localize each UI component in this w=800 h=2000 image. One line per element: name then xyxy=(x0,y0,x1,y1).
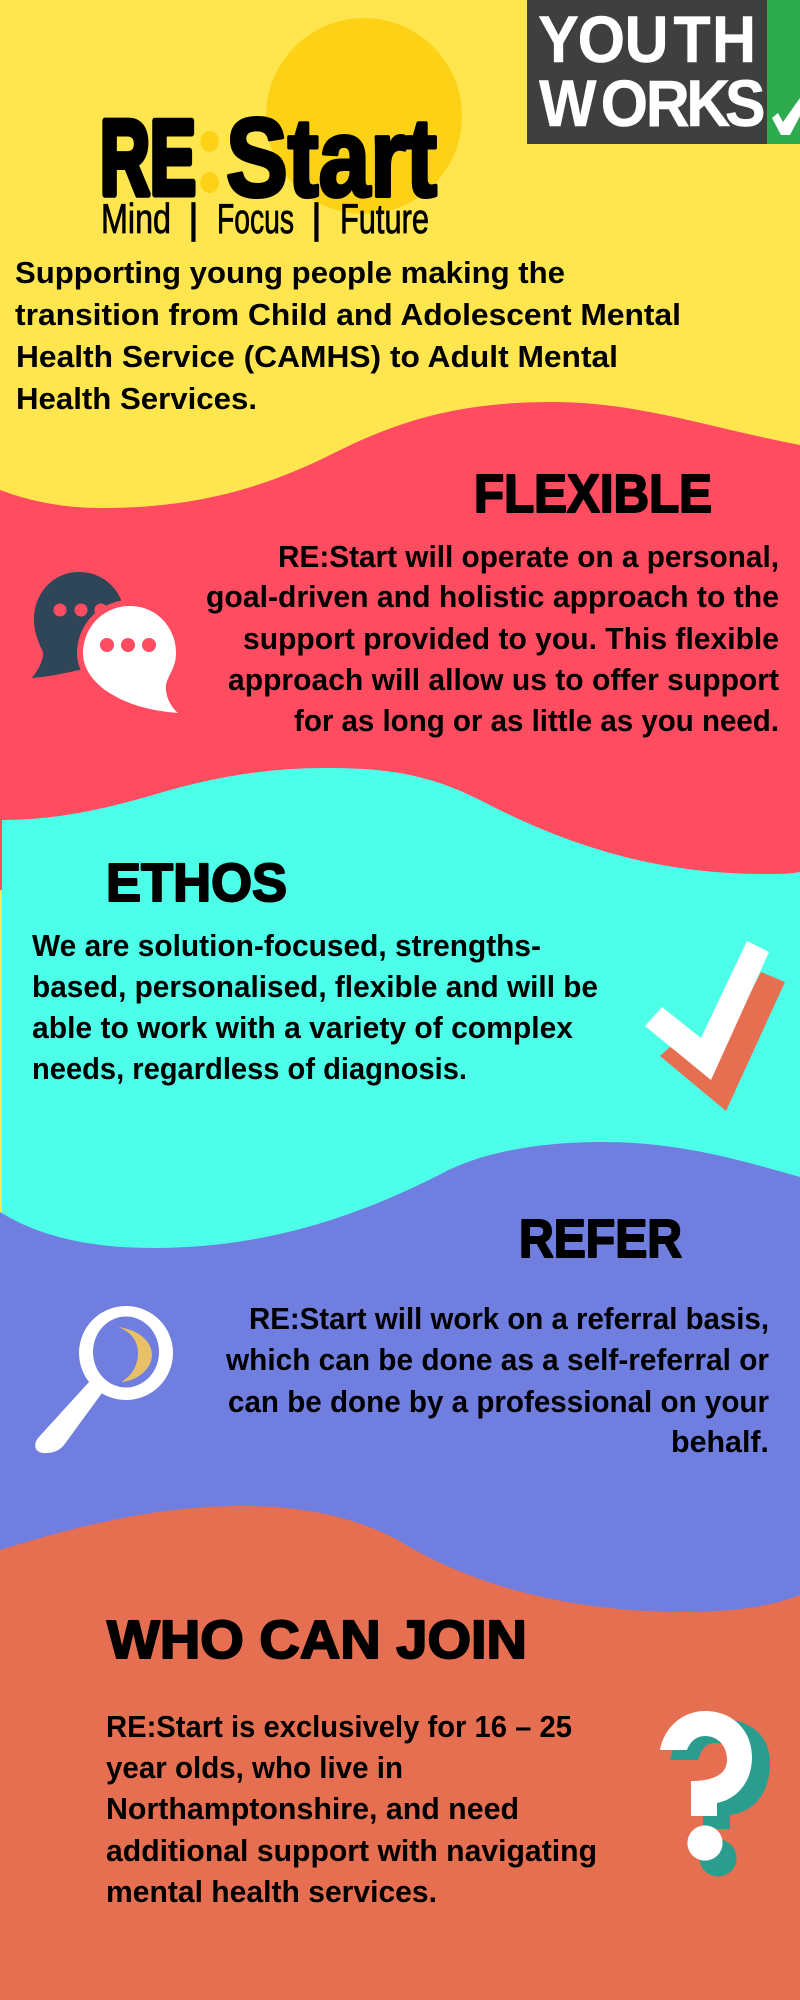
panel: refer xyxy=(0,1142,800,1615)
cyan wave background xyxy=(2,768,800,1250)
body text: refer: behalf. xyxy=(671,1424,769,1459)
icon: check mark xyxy=(645,941,785,1111)
logo: Youth Works xyxy=(527,0,800,144)
body text: who can join: Northamptonshire, and need xyxy=(106,1791,519,1826)
body text: refer: RE:Start will work on a referral basis, xyxy=(249,1301,769,1336)
tagline: Mind xyxy=(101,195,171,242)
intro text: Health Services. xyxy=(16,381,257,416)
intro text: Health Service (CAMHS) to Adult Mental xyxy=(16,339,618,374)
body text: flexible: for as long or as little as you need. xyxy=(294,703,779,738)
body text: ethos: We are solution-focused, strengths- xyxy=(32,928,541,963)
logo: Youth Works: WORKS xyxy=(539,68,765,141)
decorative sun circle xyxy=(266,18,462,214)
title: RE:Start wordmark: RE xyxy=(100,99,196,217)
body text: refer xyxy=(225,1301,769,1459)
body text: who can join: RE:Start is exclusively for 16 – 25 xyxy=(106,1709,572,1744)
body text: flexible: goal-driven and holistic approach to the xyxy=(206,579,779,614)
icon: speech bubbles xyxy=(32,572,178,713)
icon: magnifying glass xyxy=(35,1306,173,1453)
tagline xyxy=(101,195,429,242)
indigo wave background xyxy=(0,1142,800,1615)
body text: ethos: needs, regardless of diagnosis. xyxy=(32,1051,467,1086)
intro text: transition from Child and Adolescent Mental xyxy=(15,297,681,332)
title: RE:Start wordmark: : xyxy=(191,77,229,219)
body text: ethos xyxy=(32,928,598,1086)
body text: who can join xyxy=(106,1709,597,1909)
body text: flexible xyxy=(206,539,779,738)
heading: refer: REFER xyxy=(519,1209,682,1269)
heading: who can join: WHO CAN JOIN xyxy=(107,1610,527,1670)
body text: refer: can be done by a professional on your xyxy=(228,1384,769,1419)
tagline: Focus xyxy=(217,195,294,242)
heading: ethos: ETHOS xyxy=(106,853,287,913)
panel: who can join xyxy=(0,1506,800,2000)
body text: who can join: mental health services. xyxy=(106,1874,437,1909)
red wave background xyxy=(0,402,800,890)
orange wave background xyxy=(0,1506,800,2000)
body text: who can join: year olds, who live in xyxy=(106,1750,403,1785)
title: RE:Start wordmark xyxy=(100,77,437,220)
body text: refer: which can be done as a self-referral or xyxy=(225,1342,769,1377)
tagline: Future xyxy=(340,195,429,242)
icon: question mark xyxy=(660,1711,770,1877)
body text: flexible: support provided to you. This flexible xyxy=(243,621,779,656)
intro text: Supporting young people making the xyxy=(15,255,565,290)
body text: who can join: additional support with navigating xyxy=(106,1833,597,1868)
body text: flexible: RE:Start will operate on a personal, xyxy=(278,539,779,574)
tagline: | xyxy=(311,195,322,242)
tagline: | xyxy=(188,195,199,242)
body text: ethos: based, personalised, flexible and will be xyxy=(32,969,598,1004)
panel: ethos xyxy=(2,768,800,1250)
body text: flexible: approach will allow us to offer support xyxy=(228,662,779,697)
panel: flexible xyxy=(0,402,800,890)
title: RE:Start wordmark: Start xyxy=(226,96,437,220)
body text: ethos: able to work with a variety of complex xyxy=(32,1010,574,1045)
logo: Youth Works: YOUTH xyxy=(538,4,756,77)
intro text xyxy=(15,255,681,416)
heading: flexible: FLEXIBLE xyxy=(474,464,712,524)
